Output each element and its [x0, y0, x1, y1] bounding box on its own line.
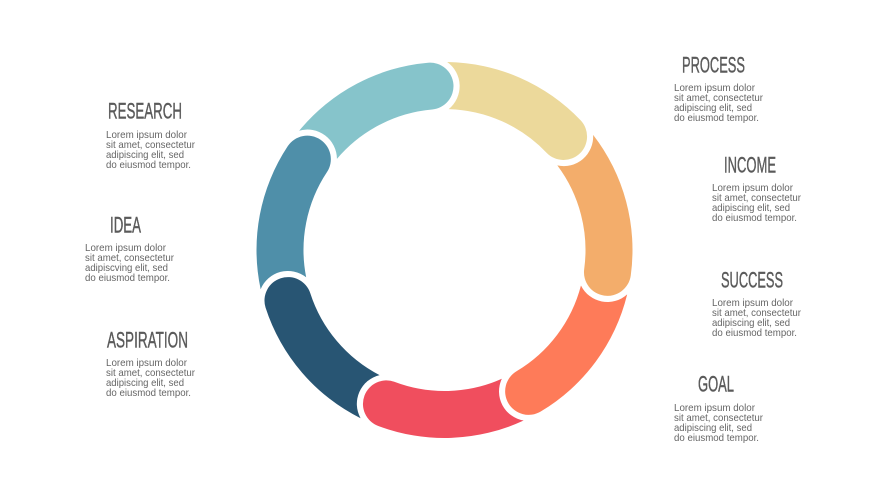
text: success description: sit amet, consectetur	[712, 308, 801, 319]
segment: income (orange)	[513, 133, 685, 306]
text: income description: adipiscing elit, sed	[712, 203, 790, 214]
heading: aspiration: ASPIRATION	[107, 328, 188, 352]
text: income description: do eiusmod tempor.	[712, 213, 797, 224]
text: idea description: sit amet, consectetur	[85, 253, 174, 264]
segment: success (coral)	[502, 277, 628, 426]
text: goal description: adipiscing elit, sed	[674, 423, 752, 434]
text: success description: Lorem ipsum dolor	[712, 298, 793, 309]
text: research description: Lorem ipsum dolor	[106, 130, 187, 141]
label block: process	[674, 52, 763, 124]
text: aspiration description: sit amet, consectetur	[106, 368, 195, 379]
heading: goal: GOAL	[698, 372, 734, 396]
text: idea description: adipiscving elit, sed	[85, 263, 168, 274]
label block: idea	[85, 212, 174, 284]
heading: success: SUCCESS	[721, 268, 783, 292]
segment: goal (red)	[354, 326, 526, 488]
segment: research (light teal)	[298, 20, 463, 192]
heading: idea: IDEA	[110, 212, 141, 238]
text: aspiration description: Lorem ipsum dolor	[106, 358, 187, 369]
text: process description: sit amet, consectetur	[674, 93, 763, 104]
text: process description: Lorem ipsum dolor	[674, 83, 755, 94]
text: goal description: do eiusmod tempor.	[674, 433, 759, 444]
label block: success	[712, 268, 801, 339]
text: research description: sit amet, consectetur	[106, 140, 195, 151]
text: aspiration description: do eiusmod tempor.	[106, 388, 191, 399]
text: process description: adipiscing elit, sed	[674, 103, 752, 114]
text: process description: do eiusmod tempor.	[674, 113, 759, 124]
circular ring diagram	[220, 20, 685, 488]
heading: process: PROCESS	[682, 52, 745, 78]
label block: research	[106, 98, 195, 171]
heading: research: RESEARCH	[108, 98, 182, 124]
segment: process (yellow)	[445, 50, 589, 170]
segment: aspiration (navy)	[236, 270, 401, 419]
text: research description: do eiusmod tempor.	[106, 160, 191, 171]
text: goal description: sit amet, consectetur	[674, 413, 763, 424]
text: income description: Lorem ipsum dolor	[712, 183, 793, 194]
text: idea description: Lorem ipsum dolor	[85, 243, 166, 254]
label block: income	[712, 152, 801, 224]
text: aspiration description: adipiscing elit, sed	[106, 378, 184, 389]
text: income description: sit amet, consectetur	[712, 193, 801, 204]
label block: goal	[674, 372, 763, 444]
heading: income: INCOME	[724, 152, 776, 178]
label block: aspiration	[106, 328, 195, 399]
text: success description: adipiscing elit, sed	[712, 318, 790, 329]
text: idea description: do eiusmod tempor.	[85, 273, 170, 284]
text: research description: adipiscing elit, sed	[106, 150, 184, 161]
text: success description: do eiusmod tempor.	[712, 328, 797, 339]
text: goal description: Lorem ipsum dolor	[674, 403, 755, 414]
segment: idea (steel blue)	[220, 130, 364, 292]
